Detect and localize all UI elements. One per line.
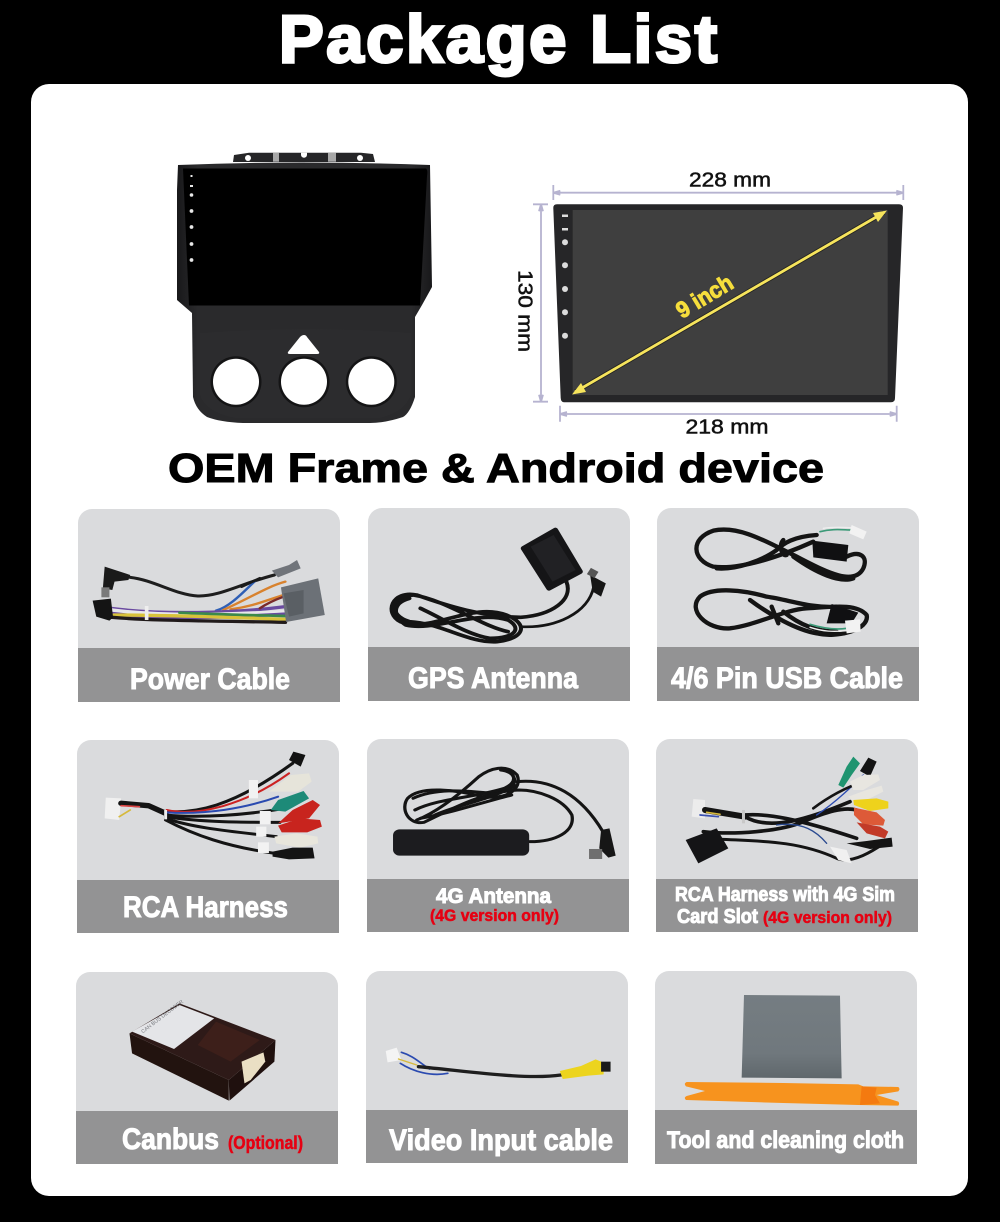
dimension: height: 130 mm bbox=[514, 270, 536, 352]
band bbox=[655, 1110, 917, 1164]
device body bbox=[553, 204, 903, 402]
label: (4G version only) bbox=[763, 908, 892, 927]
photo: cleaning cloth and pry tool bbox=[685, 995, 899, 1106]
panel: tool and cleaning cloth bbox=[655, 971, 917, 1164]
photo: GPS antenna bbox=[392, 530, 606, 642]
label: RCA Harness bbox=[123, 891, 288, 924]
band bbox=[366, 1110, 628, 1163]
label: Card Slot bbox=[677, 905, 758, 928]
device screen bbox=[573, 210, 888, 395]
label bbox=[122, 1123, 303, 1156]
label: Canbus bbox=[122, 1123, 219, 1156]
band bbox=[656, 879, 918, 932]
band bbox=[367, 879, 629, 932]
label: Power Cable bbox=[130, 663, 290, 696]
panel: 4G antenna bbox=[367, 739, 629, 932]
card background bbox=[367, 739, 629, 932]
photo: canbus decoder box bbox=[129, 999, 275, 1101]
band bbox=[368, 647, 630, 701]
label: (Optional) bbox=[228, 1133, 303, 1153]
photo: RCA harness with SIM slot bbox=[686, 757, 893, 863]
title: Package List bbox=[279, 2, 717, 77]
photo: USB cables bbox=[696, 525, 867, 635]
label: (4G version only) bbox=[430, 907, 559, 925]
card background bbox=[657, 508, 919, 701]
panel: power cable bbox=[78, 509, 340, 702]
label: Tool and cleaning cloth bbox=[667, 1127, 904, 1154]
dimension: height bbox=[514, 204, 548, 402]
dimension: bottom width: 218 mm bbox=[686, 416, 768, 438]
band bbox=[76, 1111, 338, 1164]
photo: 4G antenna bbox=[393, 768, 616, 859]
label: GPS Antenna bbox=[408, 662, 578, 695]
panel: GPS antenna bbox=[368, 508, 630, 701]
label: RCA Harness with 4G Sim bbox=[675, 883, 895, 906]
photo: RCA harness bbox=[105, 752, 322, 859]
screen size label: 9 inch bbox=[671, 269, 738, 323]
panel: USB cable bbox=[657, 508, 919, 701]
card background bbox=[77, 740, 339, 933]
card background bbox=[78, 509, 340, 702]
heading: OEM frame and Android device: OEM Frame & Android device bbox=[168, 445, 824, 491]
band bbox=[77, 880, 339, 933]
photo: video input cable bbox=[386, 1048, 611, 1079]
dimension: top width bbox=[553, 170, 903, 200]
panel: canbus bbox=[76, 972, 338, 1164]
dimension: bottom width bbox=[560, 406, 897, 438]
label: 4/6 Pin USB Cable bbox=[671, 662, 903, 695]
diagonal arrow bbox=[572, 210, 887, 394]
card background bbox=[368, 508, 630, 701]
card background bbox=[366, 971, 628, 1163]
label: 4G Antenna bbox=[436, 885, 551, 908]
card background bbox=[656, 739, 918, 932]
panel: RCA harness bbox=[77, 740, 339, 933]
label: Video Input cable bbox=[389, 1124, 613, 1157]
panel: video input cable bbox=[366, 971, 628, 1163]
label bbox=[430, 885, 559, 925]
band bbox=[78, 648, 340, 702]
photo: power cable bbox=[93, 560, 325, 622]
label bbox=[675, 883, 895, 928]
band bbox=[657, 647, 919, 701]
illustration: Android device with dimensions bbox=[514, 170, 903, 438]
photo: canbus decoder box: CAN BUS DECODER bbox=[140, 999, 185, 1035]
card background bbox=[76, 972, 338, 1164]
card background bbox=[655, 971, 917, 1164]
dimension: top width: 228 mm bbox=[689, 170, 771, 192]
panel: RCA harness with 4G SIM bbox=[656, 739, 918, 932]
device side icons bbox=[562, 214, 568, 339]
illustration: OEM frame with Android screen bbox=[177, 153, 432, 423]
